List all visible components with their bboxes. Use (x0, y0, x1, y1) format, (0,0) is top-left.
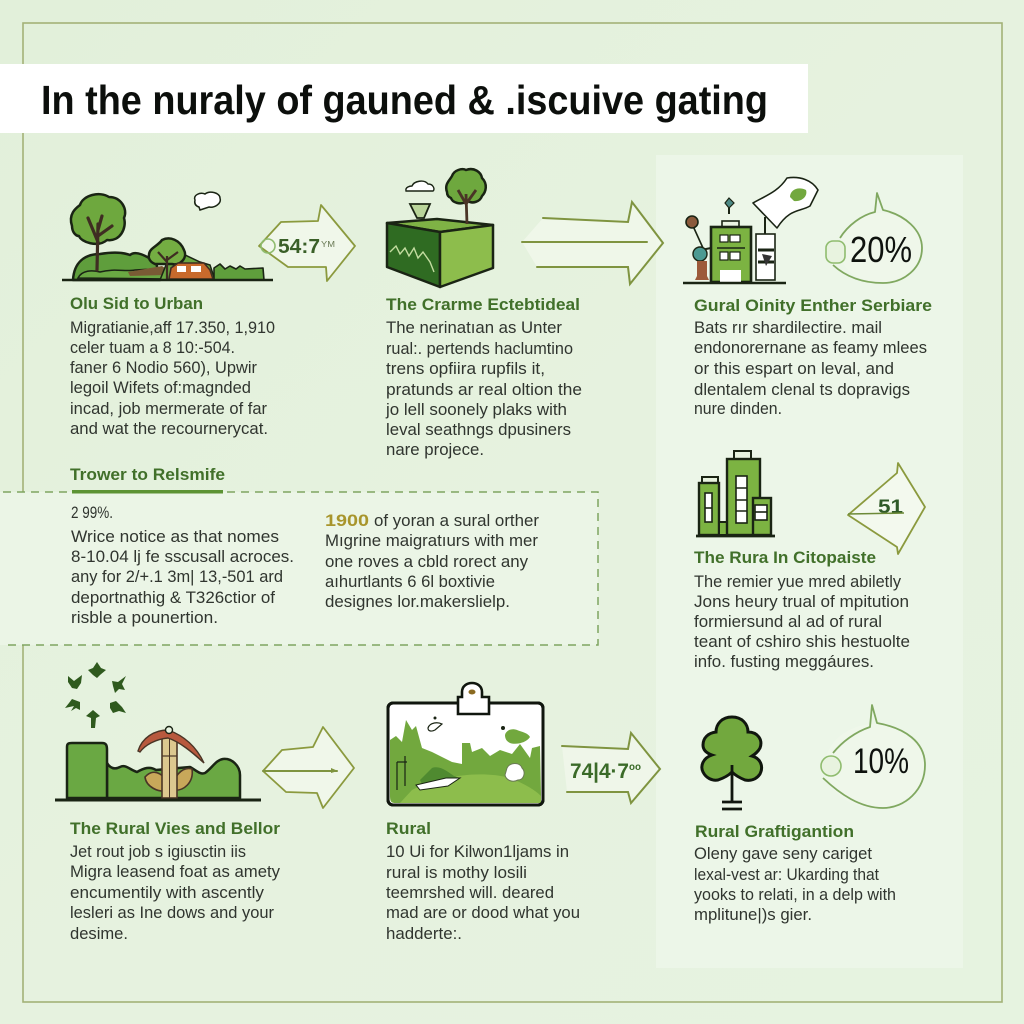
text block: or this espart on leval, and (694, 360, 894, 378)
panel: right column background (656, 155, 963, 968)
text block: right: Mıgrine maigratıurs with mer (325, 532, 539, 550)
text block: incad, job mermerate of far (70, 400, 268, 418)
arrow: diamond with 51: 51 (878, 497, 904, 518)
title banner (0, 64, 808, 133)
text block: pratunds ar real oltion the (386, 381, 582, 399)
text block (385, 319, 582, 459)
arrow with 74|4.7: oo (629, 762, 641, 773)
text block: right (325, 511, 540, 611)
text block: legoil Wifets of:magnded (70, 379, 251, 397)
text block: left (71, 504, 294, 627)
text block: left: deportnathig & T326ctior of (71, 589, 275, 607)
text block: teemrshed will. deared (386, 884, 554, 902)
panel: Rural (386, 683, 660, 943)
text block: yooks to relati, in a delp with (694, 886, 896, 904)
icon: land cube with tree (387, 169, 493, 287)
text block: left: any for 2/+.1 3m| 13,-501 ard (71, 568, 283, 586)
panel: Trower to Relsmife (0, 465, 598, 645)
text block: leval seathngs dpusiners (386, 421, 571, 439)
text block: dlentalem clenal ts dopravigs (694, 381, 910, 399)
heading: Olu Sid to Urban (70, 295, 203, 313)
text block (694, 573, 910, 671)
text block: right: designes lor.makerslielp. (325, 593, 510, 611)
heading: Rural Graftigantion (695, 823, 854, 841)
arrow with 74|4.7 (562, 733, 660, 803)
text block: right: one roves a cbld rorect any (325, 553, 529, 571)
text block: mad are or dood what you (386, 904, 580, 922)
text block: left: Wrice notice as that nomes (71, 528, 279, 546)
arrow with 54:7: 54:7 (278, 236, 320, 258)
arrow: striped (522, 202, 663, 284)
text block: and wat the recourneryсat. (70, 420, 268, 438)
icon: leaf ring (65, 662, 126, 728)
text block: Jet rout job s igiusctin iis (70, 843, 246, 861)
text block: formiersund al ad of rural (694, 613, 882, 631)
arrow: split (263, 727, 354, 808)
text block: Oleny gave seny cariget (694, 845, 872, 863)
heading: Rural (386, 820, 431, 838)
text block: desime. (70, 925, 128, 943)
icon: rural landscape with car (62, 192, 273, 280)
icon: framed landscape (388, 683, 543, 805)
text block: nure dinden. (694, 400, 782, 418)
text block: The nerinatıan as Unter (386, 319, 563, 337)
heading: Trower to Relsmife (70, 465, 225, 484)
title: In the nuraly of gauned & .iscuive gating (41, 77, 768, 123)
text block: right: 1900 (325, 511, 369, 530)
text block: Migratianie,aff 17.350, 1,910 (70, 319, 275, 337)
text block: Bats rır shardilectire. mail (694, 319, 882, 337)
icon: pickaxe field (55, 726, 261, 800)
text block: Jons heury trual of mpitution (694, 593, 909, 611)
text block: lesleri as Ine dows and your (70, 904, 274, 922)
panel: Old side to urban (62, 192, 355, 438)
text block: hadderte:. (386, 925, 462, 943)
icon: city towers (696, 451, 775, 536)
callout: 20% (826, 193, 922, 283)
panel: Gural Oinity (683, 178, 932, 418)
text block: mplitune|)s gier. (694, 906, 812, 924)
text block: celer tuam a 8 10:-504. (70, 339, 235, 357)
text block (694, 319, 927, 418)
text block: The remier yue mred abiletly (694, 573, 902, 591)
text block: lexal-vest ar: Ukarding that (694, 866, 879, 884)
heading: The Rural Vies and Bellor (70, 820, 281, 838)
arrow with 74|4.7: 74|4·7 (570, 760, 629, 783)
text block: rural is mothy losili (386, 864, 527, 882)
panel: The Rural Vies and Bellor (55, 662, 354, 943)
arrow with 54:7: YM (321, 240, 335, 249)
callout: 10% (821, 705, 925, 808)
text block (694, 845, 896, 924)
text block: trens opfiira rupfils it, (386, 360, 545, 378)
icon: building with flag (683, 178, 818, 283)
callout: 20%: 20% (850, 229, 912, 270)
icon: tree (702, 717, 762, 809)
band: dashed box (0, 492, 598, 645)
heading: The Crarme Ectebtideal (386, 296, 580, 314)
text block: faner 6 Nodio 560), Upwir (70, 359, 257, 377)
text block: left: 8-10.04 lj fe sscusall acroces. (71, 548, 294, 566)
arrow: diamond with 51 (848, 463, 925, 554)
text block: encumentily with ascently (70, 884, 265, 902)
text block: Migra leasend foat as amety (70, 863, 281, 881)
heading: Gural Oinity Enther Serbiare (694, 297, 932, 315)
text block: teant of cshiro shis hestuolte (694, 633, 910, 651)
text block: right: of yoran a sural orther (374, 512, 540, 530)
text block (70, 319, 275, 438)
arrow with 54:7 (259, 205, 355, 281)
text block: endonorernane as feamy mlees (694, 339, 927, 357)
text block: 10 Ui for Kilwon1ljams in (386, 843, 569, 861)
text block: right: aıhurtlants 6 6l boxtivie (325, 573, 495, 591)
text block: left: 2 99%. (71, 504, 113, 522)
text block: nare projece. (386, 441, 484, 459)
text block: info. fusting meggáures. (694, 653, 874, 671)
text block: rual:. pertends haclumtino (386, 340, 573, 358)
heading: The Rura In Citopaiste (694, 549, 876, 567)
panel: Rural Graftigantion (694, 705, 925, 924)
text block (70, 843, 281, 943)
callout: 10%: 10% (853, 742, 909, 781)
panel: The Rura In Citopaiste (694, 451, 925, 671)
panel: The Crarme Ectebtideal (385, 169, 663, 459)
heading underline (72, 490, 223, 494)
text block: jo lell soonely plaks with (385, 401, 567, 419)
text block: left: risble a pounertion. (71, 609, 218, 627)
text block (386, 843, 580, 943)
